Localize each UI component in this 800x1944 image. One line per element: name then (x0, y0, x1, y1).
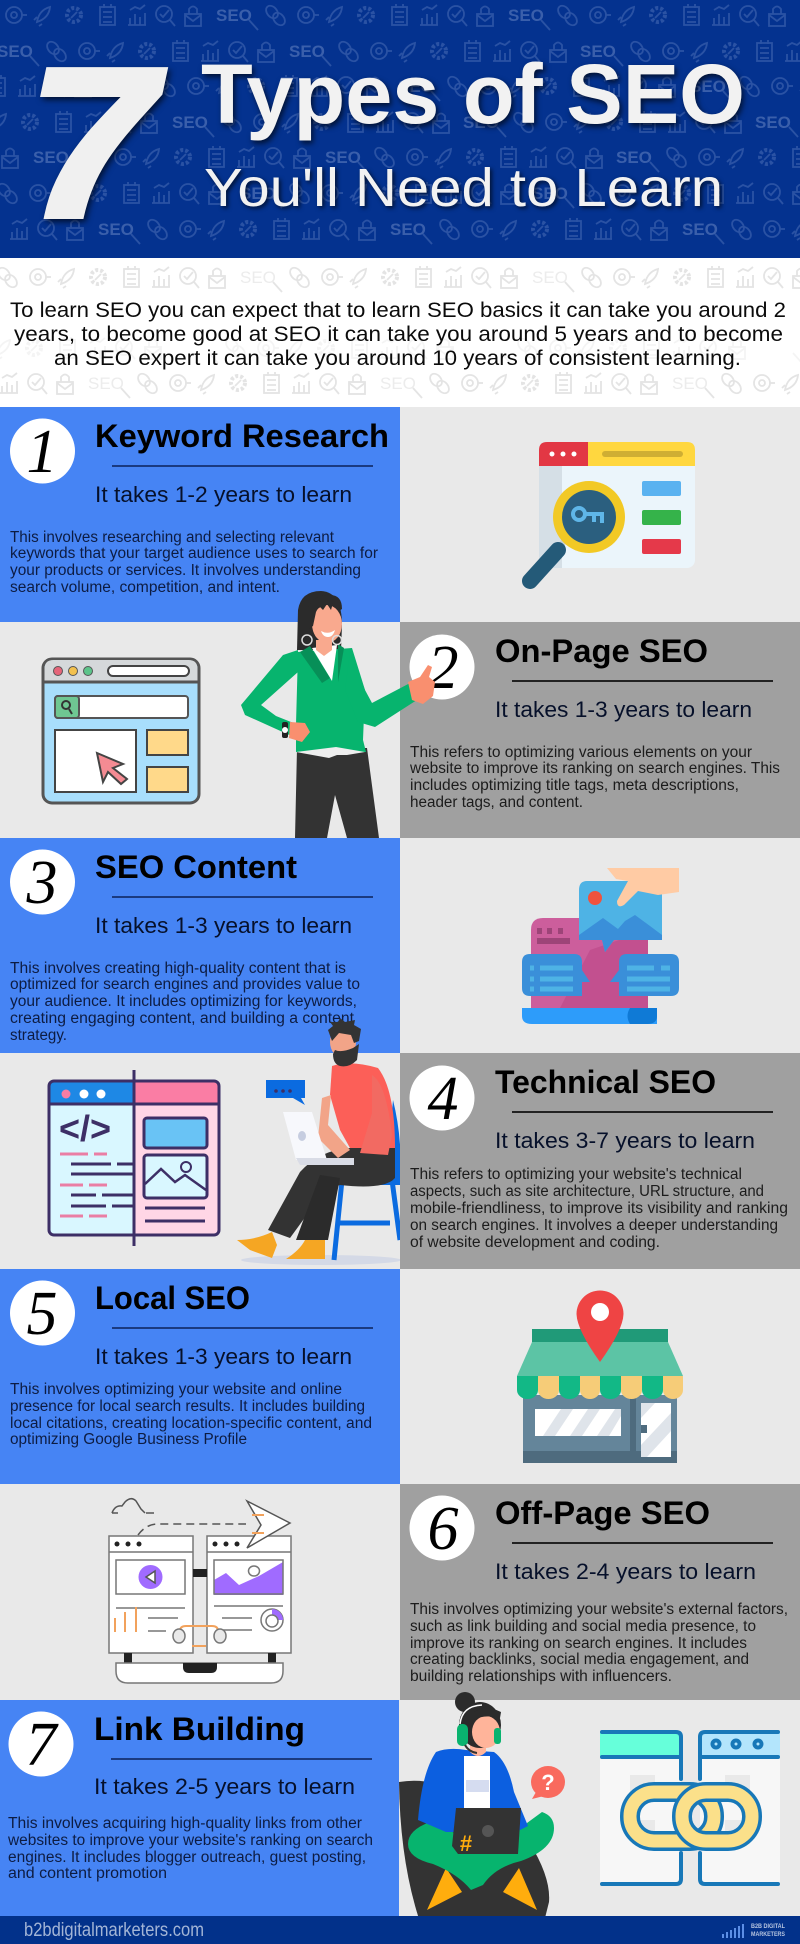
header banner: SEO (682, 220, 718, 239)
header banner (0, 0, 800, 258)
panel 4: Technical SEO: 4 (428, 1065, 458, 1133)
icon: browser window with cursor (43, 659, 199, 803)
panel 4: Technical SEO: mobile-friendliness, to improve its visibility and ranking (410, 1200, 788, 1217)
panel 1: Keyword Research: keywords that your target audience uses to search for (10, 545, 378, 562)
panel 3: SEO Content (10, 849, 373, 1044)
panel 4: Technical SEO (410, 1064, 788, 1251)
panel 2: On-Page SEO (409, 633, 780, 811)
header banner: SEO (289, 42, 325, 61)
footer website text: b2bdigitalmarketers.com (24, 1920, 204, 1941)
panel 2: On-Page SEO: 2 (428, 634, 458, 702)
panel 1: Keyword Research: Keyword Research (95, 418, 389, 454)
panel 2: On-Page SEO: header tags, and content. (410, 794, 583, 811)
panel 6: Off-Page SEO: 6 (428, 1495, 458, 1563)
icon: linked web pages line art (109, 1499, 291, 1683)
panel backgrounds grid (0, 407, 800, 1916)
panel 7: Link Building: It takes 2-5 years to learn (94, 1774, 355, 1799)
title: Types of SEO: Types of SEO (201, 47, 745, 141)
footer logo: B2B DIGITAL (751, 1924, 785, 1930)
header banner: SEO (755, 113, 791, 132)
illustration: man on laptop (237, 1018, 401, 1265)
panel 1: Keyword Research: your products or services. It involves understanding (10, 562, 361, 579)
header banner: SEO (172, 113, 208, 132)
panel 5: Local SEO: Local SEO (95, 1280, 250, 1316)
intro band: SEO (240, 268, 276, 287)
icon: question bubble: ? (541, 1770, 555, 1795)
panel 6: Off-Page SEO: building relationships with influencers. (410, 1668, 672, 1685)
panel 1: Keyword Research (10, 418, 389, 596)
header banner: SEO (532, 184, 568, 203)
header banner: SEO (106, 77, 142, 96)
panel 7: Link Building: websites to improve your website's ranking on search (7, 1832, 373, 1849)
panel 5: Local SEO: presence for local search results. It includes building (10, 1398, 365, 1415)
intro band: SEO (380, 374, 416, 393)
header banner: SEO (390, 220, 426, 239)
subtitle: You'll Need to Learn: You'll Need to Learn (204, 158, 723, 218)
panel 4: Technical SEO: This refers to optimizing your website's technical (410, 1166, 742, 1183)
panel 5: Local SEO: It takes 1-3 years to learn (95, 1344, 352, 1369)
header banner: SEO (690, 77, 726, 96)
panel 2: On-Page SEO: website to improve its ranking on search engines. This (409, 760, 780, 777)
panel 3: SEO Content: strategy. (10, 1027, 67, 1044)
panel 5: Local SEO: optimizing Google Business Profile (10, 1431, 247, 1448)
panel 7: Link Building: and content promotion (8, 1865, 167, 1882)
panel 7: Link Building (7, 1711, 373, 1882)
icon: shop with map pin (517, 1290, 683, 1463)
footer logo (722, 1924, 785, 1938)
panel 3: SEO Content: creating engaging content, and building a content (10, 1010, 355, 1027)
panel 6: Off-Page SEO (410, 1495, 788, 1685)
panel 2: On-Page SEO: This refers to optimizing various elements on your (410, 744, 752, 761)
intro band (0, 258, 800, 407)
panel 5: Local SEO: local citations, creating location-specific content, and (10, 1415, 372, 1432)
panel 7: Link Building: 7 (26, 1711, 60, 1779)
panel 2: On-Page SEO: It takes 1-3 years to learn (495, 697, 752, 722)
panel 4: Technical SEO: on search engines. It involves a deeper understanding (410, 1217, 778, 1234)
panel 2: On-Page SEO: includes optimizing title tags, meta descriptions, (410, 777, 739, 794)
intro text: To learn SEO you can expect that to learn SEO basics it can take you around 2 (10, 299, 786, 322)
illustration: woman pointing (241, 591, 435, 838)
panel 4: Technical SEO: Technical SEO (495, 1064, 716, 1100)
intro text: years, to become good at SEO it can take you around 5 years and to become (14, 323, 783, 346)
panel 6: Off-Page SEO: Off-Page SEO (495, 1495, 710, 1531)
header banner: SEO (463, 113, 499, 132)
panel 1: Keyword Research: 1 (26, 418, 58, 486)
intro band: SEO (532, 268, 568, 287)
panel 6: Off-Page SEO: It takes 2-4 years to learn (495, 1559, 756, 1584)
header banner: SEO (98, 220, 134, 239)
footer bar (0, 1916, 800, 1944)
icon: content chat laptop (522, 868, 679, 1024)
header banner: SEO (325, 148, 361, 167)
panel 5: Local SEO: 5 (26, 1280, 58, 1348)
illustration: woman with headset on beanbag: # (460, 1831, 472, 1856)
intro text: an SEO expert it can take you around 10 years of consistent learning. (54, 347, 741, 370)
panel 4: Technical SEO: aspects, such as site architecture, URL structure, and (410, 1183, 764, 1200)
intro text (10, 299, 786, 370)
header banner: SEO (240, 184, 276, 203)
icon: question bubble (531, 1766, 565, 1799)
header banner: SEO (398, 77, 434, 96)
panel 1: Keyword Research: search volume, competition, and intent. (10, 579, 280, 596)
header banner: SEO (33, 148, 69, 167)
panel 6: Off-Page SEO: such as link building and social media presence, to (410, 1618, 756, 1635)
panel 5: Local SEO: This involves optimizing your website and online (10, 1381, 342, 1398)
panel 6: Off-Page SEO: improve its ranking on search engines. It includes (410, 1635, 747, 1652)
footer logo: MARKETERS (751, 1932, 785, 1938)
header banner: SEO (508, 6, 544, 25)
panel 1: Keyword Research: It takes 1-2 years to learn (95, 482, 352, 507)
panel 7: Link Building: Link Building (94, 1711, 305, 1747)
panel 4: Technical SEO: of website development and coding. (410, 1234, 660, 1251)
intro band: SEO (88, 374, 124, 393)
panel 7: Link Building: This involves acquiring high-quality links from other (8, 1815, 362, 1832)
illustration: woman with headset on beanbag (399, 1692, 554, 1922)
big numeral 7: 7 (28, 24, 165, 261)
panel 3: SEO Content: SEO Content (95, 849, 297, 885)
icon: key magnifier window (530, 442, 695, 581)
panel 6: Off-Page SEO: This involves optimizing your website's external factors, (410, 1601, 788, 1618)
panel 1: Keyword Research: This involves researching and selecting relevant (10, 529, 335, 546)
header banner: SEO (216, 6, 252, 25)
header banner: SEO (580, 42, 616, 61)
icon: code and preview page (49, 1070, 219, 1246)
panel 3: SEO Content: It takes 1-3 years to learn (95, 913, 352, 938)
panel 4: Technical SEO: It takes 3-7 years to learn (495, 1128, 755, 1153)
panel 3: SEO Content: your audience. It includes optimizing for keywords, (10, 993, 357, 1010)
panel 3: SEO Content: This involves creating high-quality content that is (10, 960, 346, 977)
panel 5: Local SEO (10, 1280, 373, 1448)
panel 3: SEO Content: 3 (26, 849, 58, 917)
panel 6: Off-Page SEO: creating backlinks, social media engagement, and (410, 1651, 749, 1668)
intro band: SEO (672, 374, 708, 393)
header banner: SEO (616, 148, 652, 167)
icon: code and preview page: </> (59, 1108, 111, 1149)
panel 7: Link Building: engines. It includes blogger outreach, guest posting, (8, 1849, 366, 1866)
panel 2: On-Page SEO: On-Page SEO (495, 633, 708, 669)
panel 3: SEO Content: optimized for search engines and provides value to (10, 976, 360, 993)
icon: chain link between pages (600, 1732, 780, 1884)
